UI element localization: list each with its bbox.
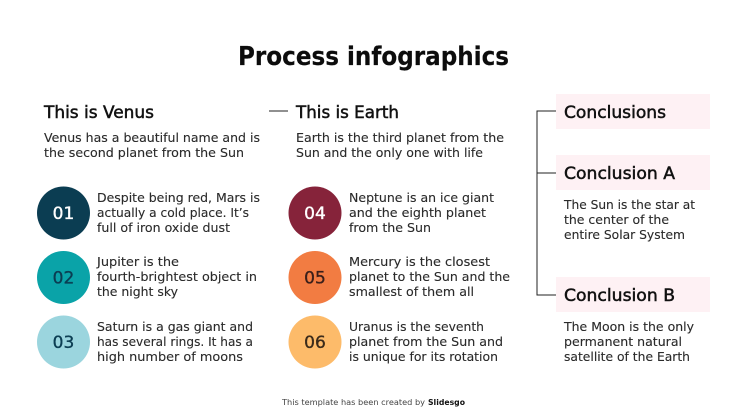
step 05: smallest of them all (349, 285, 474, 299)
heading: Conclusion B: Conclusion B (564, 285, 675, 305)
heading: Conclusion B (556, 277, 710, 312)
step 03 (37, 316, 253, 368)
text block: Venus description (44, 131, 260, 160)
step 04: Neptune is an ice giant (349, 191, 494, 205)
step 01: actually a cold place. It’s (97, 206, 249, 220)
step 02 (37, 251, 257, 304)
step 04: from the Sun (349, 221, 431, 235)
step 01: full of iron oxide dust (97, 221, 230, 235)
step 02: Jupiter is the (96, 255, 179, 269)
step 02: fourth-brightest object in (97, 270, 257, 284)
panel: Earth column (288, 102, 510, 368)
step 06: is unique for its rotation (349, 350, 498, 364)
step 05: planet to the Sun and the (349, 270, 510, 284)
text block: Venus description: Venus has a beautiful name and is (44, 131, 260, 145)
step 01 (37, 186, 260, 240)
panel: Venus column (37, 102, 260, 368)
step 03: 03 (53, 333, 74, 353)
step 06: planet from the Sun and (349, 335, 503, 349)
text block: Venus description: the second planet from the Sun (44, 146, 244, 160)
step 06: 06 (304, 333, 326, 353)
step 02: 02 (53, 268, 74, 288)
footer credit: This template has been created by (281, 398, 425, 407)
step 03: high number of moons (97, 350, 243, 364)
panel: Conclusions (556, 94, 710, 364)
text block: Conclusion B: The Moon is the only (563, 320, 694, 334)
step 04: and the eighth planet (349, 206, 486, 220)
text block: Earth description: Earth is the third planet from the (296, 131, 504, 145)
step 06: Uranus is the seventh (349, 320, 484, 334)
step 03: Saturn is a gas giant and (97, 320, 253, 334)
step 02: the night sky (97, 285, 178, 299)
heading: Conclusion A: Conclusion A (564, 163, 676, 183)
footer credit: Slidesgo (428, 398, 465, 407)
text block: Conclusion A: the center of the (564, 213, 669, 227)
step 03: has several rings. It has a (97, 335, 253, 349)
heading: Conclusions (556, 94, 710, 129)
text block: Earth description: Sun and the only one with life (296, 146, 483, 160)
connector: Venus to Earth (269, 110, 288, 112)
step 01: 01 (53, 204, 74, 224)
heading: This is Earth: This is Earth (295, 102, 399, 122)
text block: Earth description (296, 131, 504, 160)
step 04: 04 (304, 204, 326, 224)
text block: Conclusion A (563, 198, 695, 242)
step 05: Mercury is the closest (349, 255, 490, 269)
step 05 (288, 251, 510, 304)
heading: Conclusions: Conclusions (564, 102, 666, 122)
heading: This is Venus: This is Venus (43, 102, 154, 122)
title: Process infographics (238, 42, 509, 72)
text block: Conclusion B: permanent natural (564, 335, 682, 349)
heading: Conclusion A (556, 155, 710, 190)
connector: conclusions bracket (537, 111, 556, 295)
text block: Conclusion B (563, 320, 694, 364)
step 01: Despite being red, Mars is (97, 191, 260, 205)
text block: Conclusion A: entire Solar System (564, 228, 685, 242)
text block: Conclusion A: The Sun is the star at (563, 198, 695, 212)
step 06 (288, 316, 503, 368)
step 05: 05 (304, 268, 326, 288)
step 04 (288, 186, 494, 240)
text block: Conclusion B: satellite of the Earth (564, 350, 690, 364)
